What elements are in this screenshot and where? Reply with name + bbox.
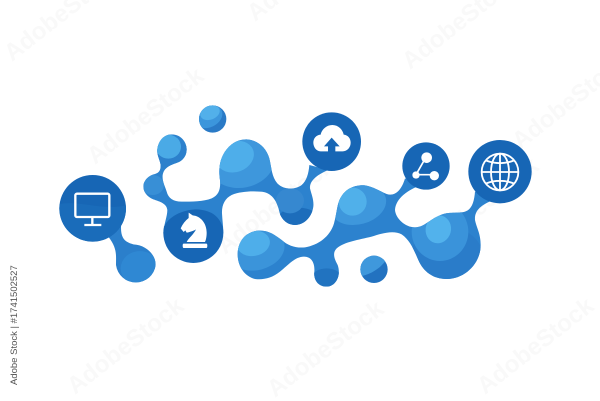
watermark pattern: AdobeStock <box>262 295 390 401</box>
icon: chess knight <box>181 213 207 248</box>
icon: monitor <box>75 194 109 225</box>
connected blobs <box>238 178 490 287</box>
icon disc: globe <box>468 140 532 203</box>
floating dot <box>360 256 388 283</box>
blob: monitor tail <box>109 226 156 282</box>
watermark pattern: AdobeStock <box>417 152 545 260</box>
icon: cloud <box>313 125 351 152</box>
icon disc: monitor <box>59 175 126 242</box>
watermark pattern: AdobeStock <box>212 152 340 260</box>
connected blobs <box>143 134 327 234</box>
watermark pattern: AdobeStock <box>62 292 190 400</box>
icon disc: cloud upload <box>302 112 361 171</box>
stock id caption: Adobe Stock | #1741502527 <box>9 265 20 385</box>
right network <box>224 112 532 290</box>
floating dot <box>199 105 226 133</box>
icon: globe <box>482 154 518 190</box>
left network <box>57 101 330 290</box>
icon: share nodes <box>412 152 439 180</box>
icon disc: chess <box>163 209 223 263</box>
icon disc: share nodes <box>402 142 450 190</box>
watermark pattern: AdobeStock <box>82 62 210 170</box>
watermark pattern: AdobeStock <box>472 292 600 400</box>
